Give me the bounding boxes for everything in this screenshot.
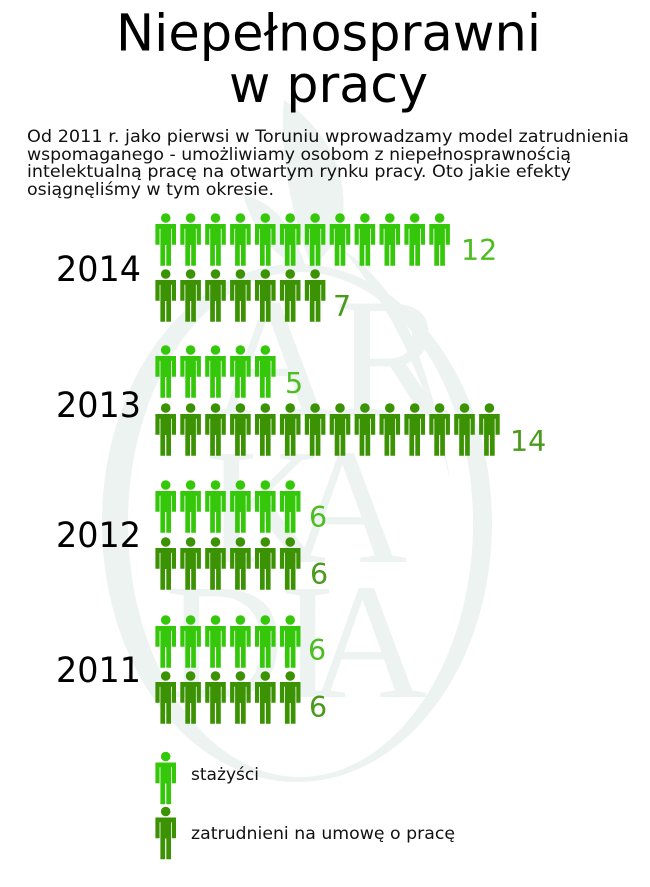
2011 employees value: 6: [309, 691, 327, 724]
2013 employees pictogram row: 14: [155, 403, 500, 456]
title: [116, 4, 541, 115]
2013 employees value: 14: [510, 425, 546, 458]
watermark: letter A second row: A: [288, 415, 407, 598]
2011 interns value: 6: [308, 634, 326, 667]
title: Niepełnosprawni: [116, 4, 541, 64]
watermark logo: [102, 100, 492, 782]
watermark: letters AR: AR: [212, 264, 449, 452]
2011 interns pictogram row: 6: [155, 615, 301, 668]
intro paragraph: Od 2011 r. jako pierwsi w Toruniu wprowadzamy model zatrudnienia: [27, 127, 629, 146]
year label 2012: 2012: [56, 516, 141, 556]
2012 interns pictogram row: 6: [155, 480, 301, 533]
2012 interns value: 6: [309, 501, 327, 534]
watermark: letter D: D: [165, 550, 284, 733]
legend icon: interns: [155, 752, 176, 804]
intro paragraph: [27, 127, 629, 199]
watermark: main leaf: [283, 100, 344, 268]
year label 2013: 2013: [56, 386, 141, 426]
legend label: interns: stażyści: [191, 765, 259, 784]
watermark: letter K: K: [205, 415, 324, 598]
year label 2011: 2011: [56, 651, 141, 691]
title: w pracy: [229, 56, 428, 115]
2014 employees pictogram row: 7: [155, 269, 325, 322]
watermark: lower leaf: [243, 195, 306, 268]
2014 interns value: 12: [461, 234, 497, 267]
watermark: letter I: I: [280, 550, 335, 733]
2011 employees pictogram row: 6: [155, 671, 301, 724]
year label 2014: 2014: [56, 250, 141, 290]
intro paragraph: osiągnęliśmy w tym okresie.: [27, 180, 274, 199]
legend label: employees: zatrudnieni na umowę o pracę: [191, 824, 455, 843]
watermark: crescent stem: [343, 250, 450, 480]
2013 interns value: 5: [285, 367, 303, 400]
intro paragraph: wspomaganego - umożliwiamy osobom z niepełnosprawnością: [27, 145, 571, 164]
watermark: oval ring: [102, 264, 492, 782]
2012 employees value: 6: [310, 558, 328, 591]
2013 interns pictogram row: 5: [155, 345, 276, 398]
watermark: letter A third row: A: [308, 550, 427, 733]
2014 employees value: 7: [333, 290, 351, 323]
legend icon: employees: [155, 807, 176, 859]
legend: [155, 752, 455, 859]
2012 employees pictogram row: 6: [155, 537, 301, 590]
intro paragraph: intelektualną pracę na otwartym rynku pracy. Oto jakie efekty: [27, 162, 571, 181]
2014 interns pictogram row: 12: [155, 213, 450, 266]
